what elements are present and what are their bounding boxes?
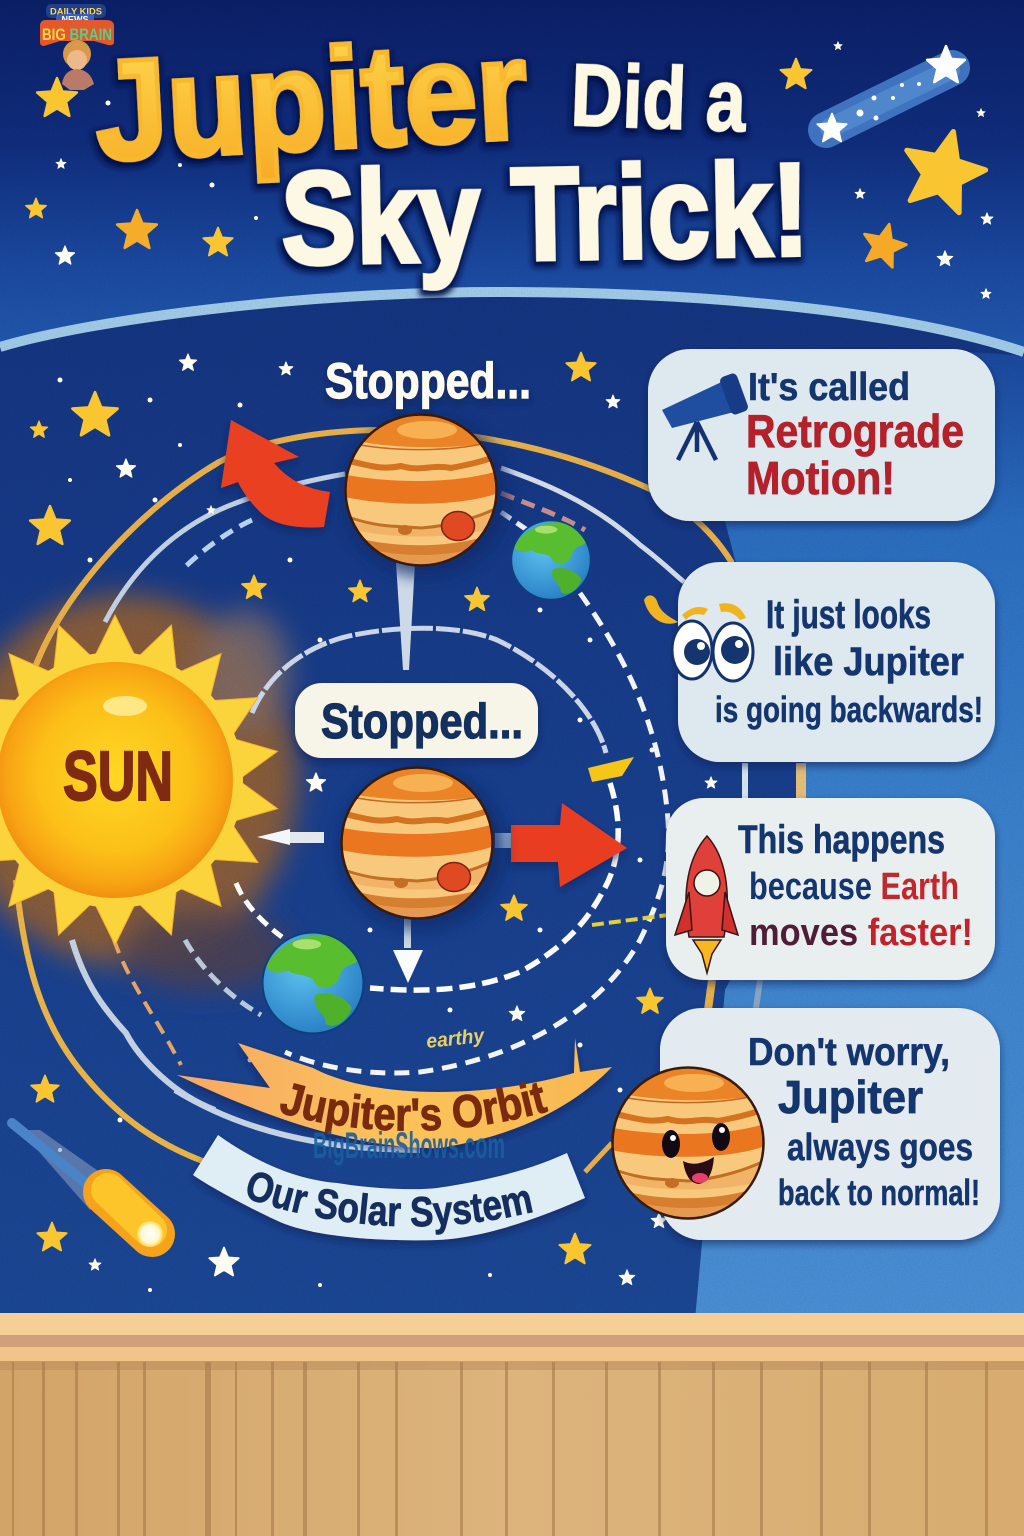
pill: Stopped middle: Stopped...: [321, 695, 523, 749]
comet bottom left: [12, 1123, 163, 1247]
Earth bottom: [262, 932, 364, 1034]
Earth top: [511, 520, 591, 600]
scattered yellow stars: [26, 59, 993, 1263]
red curved arrow: [221, 420, 330, 527]
guide arrow: top down: [396, 563, 415, 670]
callout: Jupiter back to normal: Jupiter: [778, 1071, 923, 1123]
Jupiter top: [341, 410, 510, 578]
callout: looks backwards: like Jupiter: [773, 640, 964, 684]
label: Stopped top: Stopped...: [325, 353, 531, 409]
icon: rocket: [675, 836, 738, 973]
sky background: [0, 0, 1024, 360]
smiling Jupiter: [608, 1063, 768, 1223]
guide arrow: down: [393, 918, 423, 983]
nebula haze near the sun: [0, 595, 297, 992]
wood wainscot: [0, 1361, 1024, 1536]
callout text: It just looks: [766, 593, 931, 637]
icon: telescope: [662, 372, 749, 460]
red straight arrow: [511, 803, 627, 887]
callout: Retrograde Motion: Motion!: [746, 452, 895, 504]
yellow flag marker: [588, 757, 634, 782]
wall trim: [0, 1313, 1024, 1361]
logo: Daily Kids News Big Brain: BIG BRAIN: [42, 25, 112, 44]
title: [91, 10, 810, 292]
callout: Earth moves faster: because Earth: [749, 866, 959, 908]
curved display panel: [0, 292, 1024, 1320]
banner: Jupiter's Orbit: Jupiter's Orbit: [280, 1082, 548, 1139]
pill: Stopped middle: [295, 683, 538, 758]
callout: Earth moves faster: moves faster!: [749, 912, 973, 954]
sun: [0, 615, 282, 945]
guide stub right: [495, 833, 511, 848]
callout: Retrograde Motion: [648, 349, 995, 521]
callout: Jupiter back to normal: [660, 1008, 1000, 1240]
callout text: Don't worry,: [748, 1031, 950, 1074]
title word: Jupiter: Jupiter: [91, 10, 531, 191]
sun label: SUN: [63, 737, 173, 815]
callout: looks backwards: [644, 562, 995, 762]
watermark: BigBrainShows.com: [313, 1125, 505, 1166]
banner: Our Solar System: [192, 1135, 586, 1248]
comet top right: [817, 46, 965, 142]
callout: Jupiter back to normal: always goes: [787, 1127, 973, 1169]
callout: Retrograde Motion: Retrograde: [746, 405, 964, 457]
right light-blue panel region: [690, 351, 1024, 1320]
callout: Earth moves faster: [666, 798, 995, 980]
Jupiter middle: [337, 763, 506, 931]
logo: Daily Kids News Big Brain: DAILY KIDS: [50, 6, 102, 18]
banner: Jupiter's Orbit: [177, 1038, 612, 1155]
callout text: This happens: [738, 818, 945, 862]
callout text: It's called: [748, 366, 910, 409]
panel rim: [0, 292, 1024, 352]
icon: googly eyes: [644, 595, 753, 681]
title words: Sky Trick: Sky Trick!: [280, 136, 810, 292]
logo: Daily Kids News Big Brain: NEWS: [62, 14, 88, 24]
title words: Did a: Did a: [569, 45, 749, 150]
scattered white stars and dots: [56, 41, 993, 1292]
orbit rings: [16, 430, 801, 1172]
handwritten earthy label: earthy: [425, 1025, 486, 1053]
guide arrow: left: [257, 829, 324, 845]
banner: Our Solar System: Our Solar System: [247, 1172, 533, 1235]
logo: Daily Kids News Big Brain: [40, 4, 114, 90]
